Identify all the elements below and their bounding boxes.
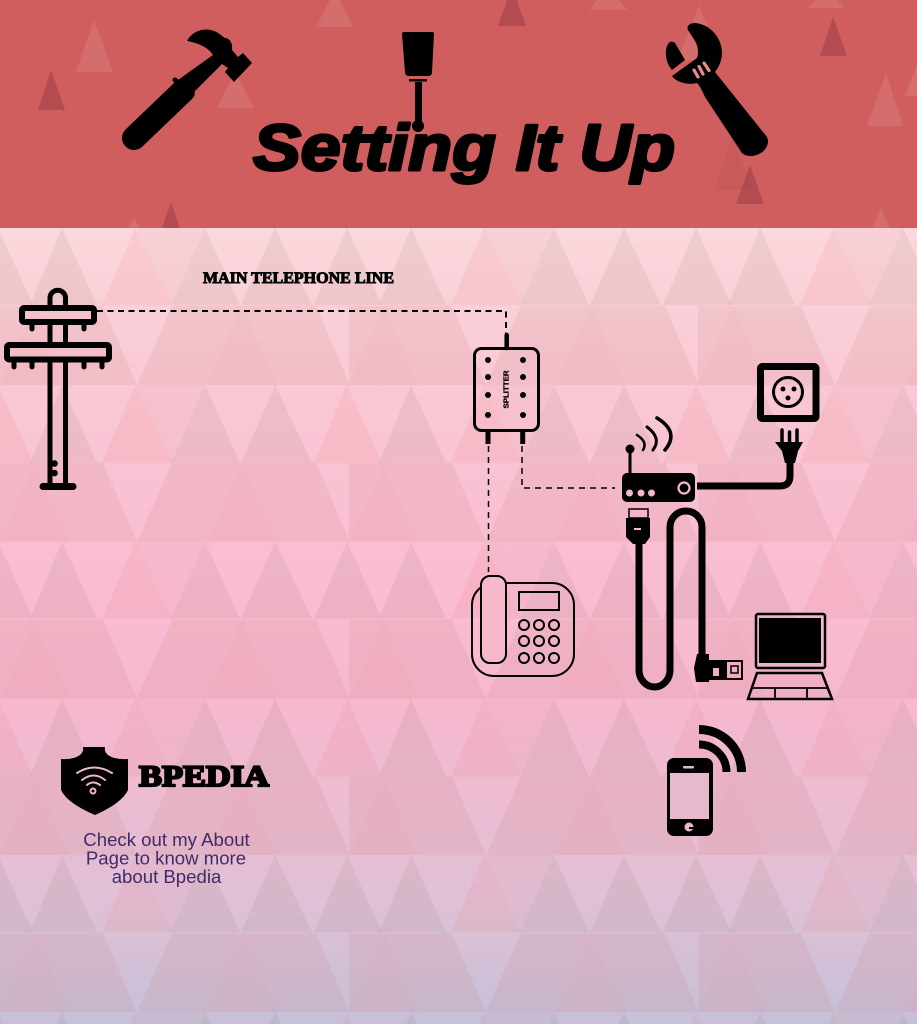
icon: hammer — [134, 29, 252, 138]
logo wordmark: BPEDIA — [139, 760, 269, 793]
text block: about note: Check out my About — [83, 829, 251, 850]
icon: smartphone with signal — [667, 730, 742, 836]
icon: telephone pole — [7, 290, 109, 486]
icon: power socket — [760, 366, 816, 418]
text block: about note: Page to know more — [86, 848, 246, 868]
icon: laptop — [748, 614, 832, 699]
icon: power plug and cord — [697, 430, 803, 486]
header band — [0, 0, 917, 228]
logo: Bpedia shield — [61, 747, 128, 815]
connector: main line dashed — [97, 311, 506, 334]
icon: screwdriver — [402, 32, 434, 132]
label: main telephone line: MAIN TELEPHONE LINE — [203, 270, 394, 287]
icon: telephone — [472, 576, 574, 676]
title: Setting It Up — [253, 111, 675, 184]
connector: splitter to telephone — [488, 446, 490, 572]
page background with triangle pattern — [0, 228, 917, 1024]
icon: splitter — [474, 335, 538, 444]
icon: splitter: SPLITTER — [504, 370, 510, 408]
connector: splitter to router — [522, 446, 615, 488]
icon: router — [622, 418, 695, 502]
icon: ethernet cable — [626, 509, 742, 687]
text block: about note: about Bpedia — [112, 866, 222, 887]
icon: wrench — [666, 23, 768, 156]
